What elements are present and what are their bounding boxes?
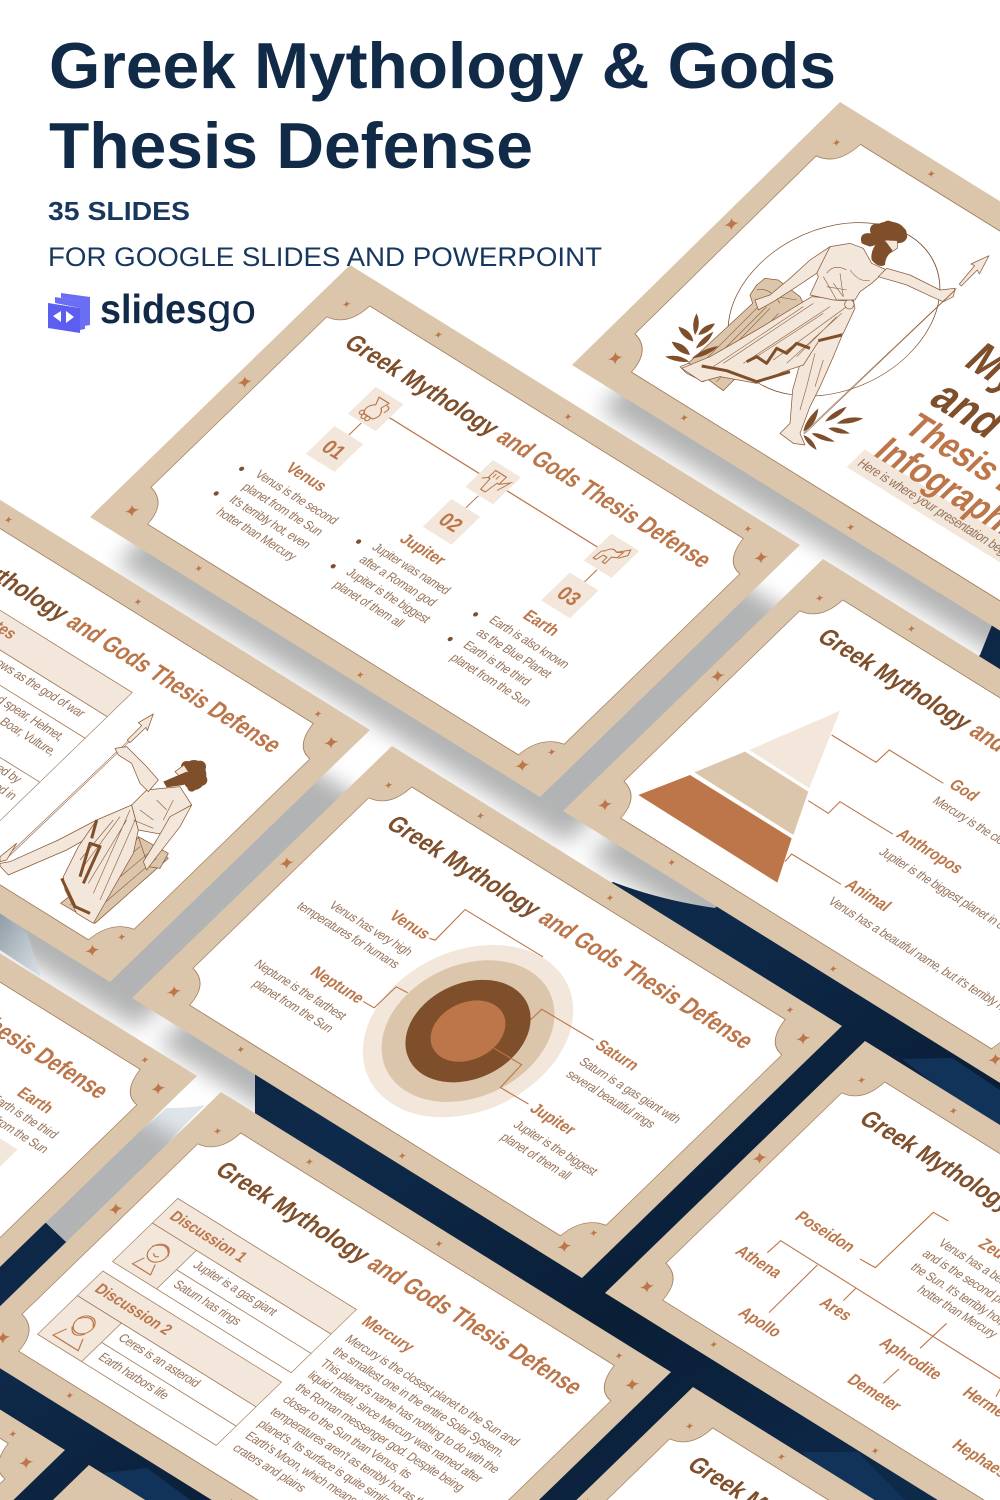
pyramid chart — [638, 711, 943, 884]
slide: three gods timeline — [90, 265, 800, 797]
Mercury text block: the smallest one in the entire Solar System. — [329, 1344, 509, 1460]
rings slide frame — [132, 746, 842, 1278]
left slide frame — [0, 796, 197, 1328]
slide: table and seated god — [0, 450, 370, 982]
bottom left frame — [0, 1170, 65, 1500]
numbers: 03 — [551, 583, 586, 610]
table: discussion 1: Saturn has rings — [170, 1277, 245, 1328]
label: Saturn — [562, 1037, 702, 1139]
numbers: 01 — [316, 437, 350, 464]
Mercury text block: Mercury — [357, 1314, 418, 1356]
timeline connectors — [349, 409, 611, 582]
pyramid slide title — [812, 624, 1000, 867]
rings slide title: Greek Mythology — [381, 811, 548, 921]
tree slide frame — [605, 1041, 1000, 1500]
label: Anthropos: Anthropos — [892, 826, 967, 877]
Mercury text block: the Roman messenger god. Despite being — [292, 1381, 468, 1494]
column: Jupiter: Jupiter is the biggest — [343, 565, 434, 626]
gods names: Poseidon — [791, 1209, 859, 1256]
label: Saturn: several beautiful rings — [563, 1067, 659, 1131]
discussion slide frame — [0, 1092, 671, 1500]
icon: jug with grapes — [356, 396, 393, 425]
label: Saturn: Saturn — [591, 1037, 643, 1074]
timeline slide title — [339, 330, 718, 573]
Mercury text block — [229, 1314, 547, 1500]
label: Earth: Earth — [13, 1085, 57, 1117]
table: discussion 2: Ceres is an asteroid — [115, 1331, 204, 1390]
label: Venus: Venus has very high — [326, 898, 416, 959]
pyramid slide frame — [563, 559, 1000, 1091]
navy background — [0, 620, 1000, 1500]
Mercury text block: closer to the Sun than Venus, its — [279, 1393, 416, 1481]
label: Venus — [294, 869, 434, 971]
column: Jupiter: Jupiter was named — [369, 540, 454, 597]
concentric rings chart — [319, 912, 617, 1150]
label: Neptune: planet from the Sun — [249, 977, 337, 1035]
column: Earth — [433, 588, 591, 709]
tinted tile — [0, 1105, 18, 1168]
column: Earth: as the Blue Planet — [473, 626, 556, 681]
discussion slide title — [210, 1157, 589, 1400]
tree connectors — [767, 1212, 1000, 1397]
numbers: 02 — [433, 509, 467, 537]
rings slide title — [381, 811, 760, 1054]
column: Earth: Earth is also known — [486, 613, 573, 671]
table: discussion 2: Earth harbors life — [95, 1350, 173, 1402]
column: Jupiter: Jupiter — [396, 531, 449, 569]
timeline frame — [90, 265, 800, 797]
label: Venus: temperatures for humans — [294, 899, 403, 971]
column: Venus: planet from the Sun — [239, 480, 327, 539]
title: Greek Mythology & Gods — [49, 29, 836, 102]
label: Saturn: Saturn is a gas giant with — [576, 1055, 685, 1126]
Mercury text block: Mercury is the closest planet to the Sun and — [342, 1332, 523, 1449]
column: Jupiter: after a Roman god — [356, 553, 440, 609]
logo wordmark: go — [207, 286, 256, 332]
cover subtitle tag — [847, 449, 1000, 617]
cover title — [865, 335, 1000, 583]
column: Jupiter — [316, 515, 478, 639]
label: Jupiter: Jupiter — [526, 1101, 579, 1139]
navy highlights — [80, 1058, 1000, 1500]
column: Venus: Venus is the second — [252, 468, 342, 527]
rings connectors — [363, 910, 594, 1104]
slide: bottom partial — [0, 1465, 539, 1500]
table: discussion 1: Discussion 1 — [165, 1208, 251, 1266]
logo wordmark: slides — [100, 286, 207, 332]
gods names: Demeter — [843, 1372, 905, 1415]
slide: bottom left partial — [0, 1170, 65, 1500]
label: Jupiter: planet of them all — [497, 1130, 574, 1182]
discussion slide title: and Gods Thesis Defense — [362, 1251, 589, 1400]
discussion slide title: Greek Mythology — [210, 1157, 377, 1267]
table: discussion 2 — [38, 1271, 281, 1445]
table slide frame — [0, 450, 370, 982]
cover frame — [572, 102, 1000, 653]
column: Jupiter: planet of them all — [330, 578, 407, 630]
label: Jupiter — [497, 1101, 619, 1191]
label: Animal: Animal — [841, 877, 895, 915]
column: Earth: planet from the Sun — [447, 651, 535, 709]
slide count: 35 SLIDES — [48, 196, 190, 226]
Mercury text block: craters and plains — [230, 1441, 310, 1495]
label: Neptune: Neptune — [306, 964, 368, 1007]
icon: pegasus — [593, 539, 632, 570]
slide: discussion tables — [0, 1092, 671, 1500]
column: Venus — [199, 442, 359, 565]
table: discussion 1 — [113, 1198, 356, 1373]
slide: rings diagram — [132, 746, 842, 1278]
Zeus description: hotter than Mercury — [914, 1283, 1000, 1341]
icon: fist with lightning — [474, 468, 513, 498]
rings slide title: and Gods Thesis Defense — [533, 905, 760, 1054]
table: discussion 2: Discussion 2 — [90, 1281, 176, 1339]
attributes table — [0, 582, 132, 822]
Mercury text block: liquid metal, since Mercury was named after — [304, 1368, 486, 1485]
table slide title — [0, 515, 288, 758]
illustration: seated god with spear — [0, 714, 207, 923]
pyramid slide title: Greek Mythology — [812, 624, 979, 734]
Mercury text block: This planet's name has nothing to do with the — [317, 1356, 503, 1476]
timeline slide title: and Gods Thesis Defense — [491, 424, 718, 573]
slide: cover — [572, 102, 1000, 659]
slide: family tree — [605, 1041, 1000, 1500]
gods names: Athena — [731, 1243, 786, 1282]
column: Venus: hotter than Mercury — [213, 505, 301, 564]
label: Earth — [0, 1071, 80, 1156]
column: Venus: It's terribly hot, even — [226, 493, 314, 551]
illustration: god with spear and column — [665, 190, 989, 450]
table slide title: and Gods Thesis Defense — [61, 609, 288, 758]
bottom frame — [0, 1465, 539, 1500]
gods names: Ares — [815, 1295, 856, 1324]
label: Neptune — [238, 940, 369, 1035]
light reflection wash — [45, 1105, 205, 1240]
gods names: Apollo — [734, 1305, 785, 1341]
logo icon — [48, 293, 90, 333]
gods names — [694, 1147, 1000, 1493]
Zeus description — [894, 1234, 1000, 1353]
bottom right frame — [433, 1387, 1000, 1500]
blue-grey reflection wedge — [0, 913, 41, 977]
timeline slide title: Greek Mythology — [339, 330, 506, 440]
label: God: God — [945, 777, 982, 805]
label: Neptune: Neptune is the farthest — [251, 957, 350, 1023]
slide: bottom right partial — [433, 1387, 1000, 1500]
title — [49, 29, 836, 182]
numbers — [316, 437, 586, 610]
label: Jupiter: Jupiter is the biggest — [510, 1118, 602, 1178]
label: Venus: Venus — [385, 908, 434, 943]
slide: left partial with Earth — [0, 796, 197, 1328]
table: discussion 1: Jupiter is a gas giant — [190, 1258, 281, 1319]
column: Earth: Earth — [519, 607, 563, 640]
gods names: Aphrodite — [875, 1335, 946, 1383]
title: Thesis Defense — [49, 109, 533, 182]
subtitle: FOR GOOGLE SLIDES AND POWERPOINT — [48, 242, 602, 272]
icon tiles — [306, 387, 639, 618]
column: Earth: Earth is the third — [460, 638, 534, 688]
slide drop shadows — [0, 178, 1000, 1374]
slide: pyramid — [563, 559, 1000, 1091]
column: Venus: Venus — [281, 460, 331, 495]
